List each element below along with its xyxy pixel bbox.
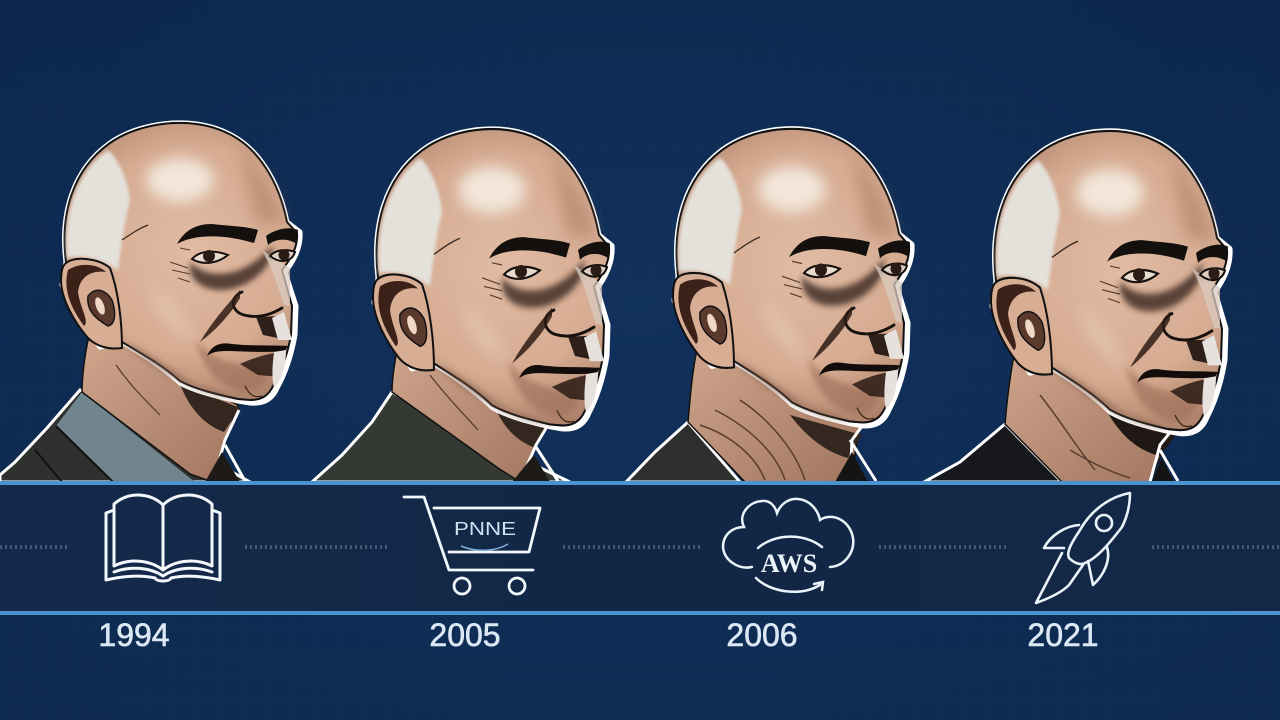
- year label: 1994: 1994: [98, 617, 170, 653]
- neck and clothing 1994: [0, 340, 250, 482]
- year label: 2006: 2006: [726, 617, 798, 653]
- portrait: 2005: [312, 129, 612, 482]
- head 1994: [61, 123, 300, 403]
- icon: rocket: [1036, 493, 1130, 603]
- timeline bottom rule: [0, 611, 1280, 615]
- icon: shopping cart: PNNE: [454, 519, 516, 539]
- neck and clothing 2005: [312, 345, 570, 482]
- icon: AWS cloud: [723, 499, 853, 592]
- neck and clothing 2021: [924, 350, 1178, 482]
- portrait: 2006: [626, 129, 912, 482]
- timeline band: [0, 484, 1280, 613]
- icon: AWS cloud: AWS: [761, 549, 817, 578]
- timeline top rule: [0, 481, 1280, 485]
- portrait: 1994: [0, 123, 300, 482]
- portrait: 2021: [924, 131, 1230, 482]
- head 2021: [991, 131, 1230, 434]
- head 2005: [373, 129, 612, 429]
- icon: open book: [106, 495, 220, 581]
- dotted connectors: [0, 545, 1280, 549]
- year label: 2021: 2021: [1027, 617, 1099, 653]
- icon: shopping cart: [404, 497, 540, 594]
- year label: 2005: 2005: [429, 617, 501, 653]
- head 2006: [673, 129, 912, 426]
- neck and clothing 2006: [626, 345, 876, 482]
